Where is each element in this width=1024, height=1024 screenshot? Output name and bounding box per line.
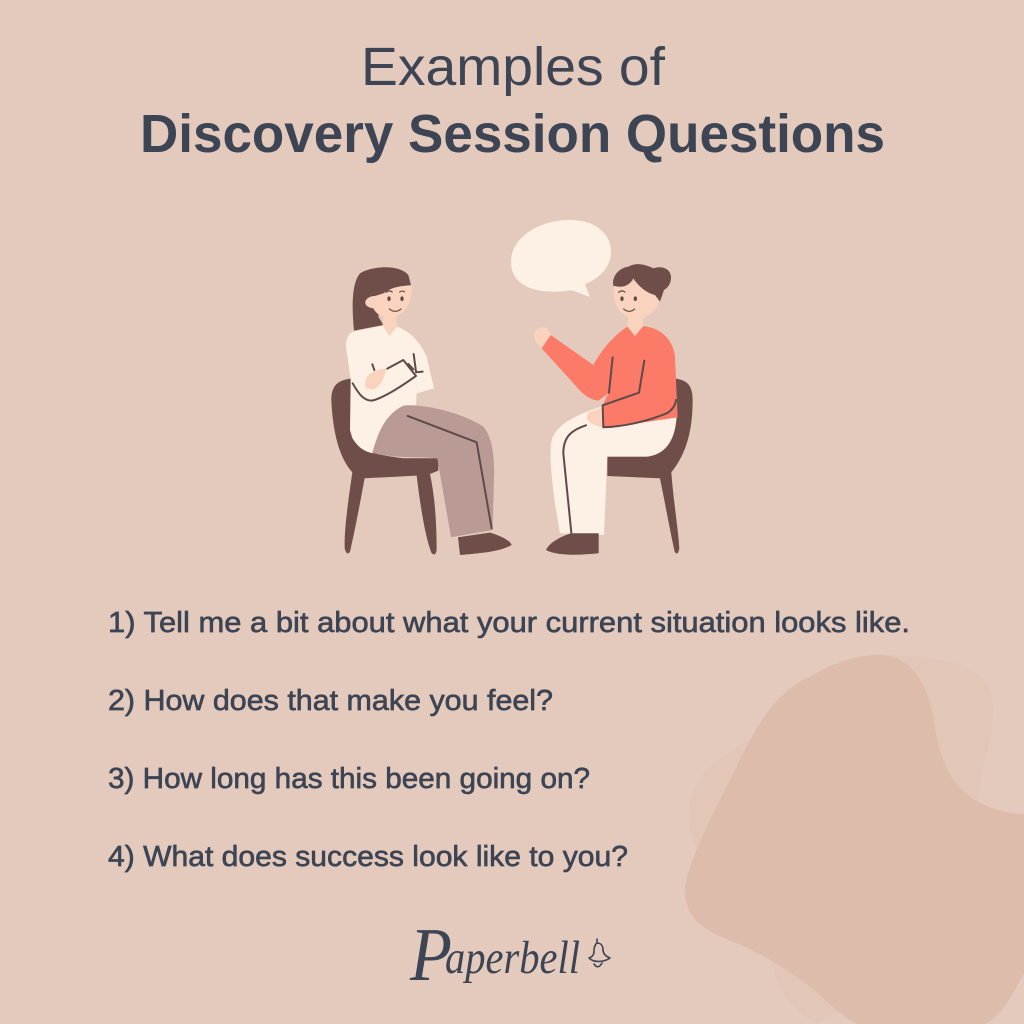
illustration: two people in a discovery session	[331, 220, 693, 555]
question 4: 4) What does success look like to you?	[108, 841, 628, 873]
person: coach with notepad	[331, 267, 512, 555]
logo: Paperbell: aperbell	[445, 932, 580, 984]
trousers	[372, 405, 494, 537]
hand	[365, 369, 386, 389]
title: Discovery Session Questions	[140, 104, 885, 164]
hair	[353, 267, 411, 331]
hair	[613, 264, 671, 302]
neck and face	[365, 286, 412, 336]
trousers	[551, 407, 677, 535]
logo: Paperbell	[409, 913, 610, 997]
neck and face	[614, 282, 659, 336]
face details	[386, 291, 405, 311]
chair	[607, 378, 693, 554]
clothing lines	[563, 357, 676, 533]
question 3: 3) How long has this been going on?	[108, 763, 590, 795]
hand on knee	[587, 407, 603, 427]
top	[542, 326, 678, 428]
question 1: 1) Tell me a bit about what your current situation looks like.	[108, 607, 910, 639]
shoe	[458, 533, 512, 555]
background blob	[685, 655, 1024, 1024]
shirt	[346, 326, 434, 453]
shoe	[546, 533, 599, 555]
chair	[331, 378, 438, 554]
hand raised	[534, 327, 552, 348]
person: client in red top	[534, 264, 693, 555]
icon: bell	[589, 939, 610, 967]
speech bubble	[511, 220, 611, 297]
clothing lines and notepad	[353, 354, 492, 528]
questions list	[108, 607, 910, 873]
title: Examples of	[361, 37, 666, 97]
logo: Paperbell: P	[409, 913, 452, 997]
question 2: 2) How does that make you feel?	[108, 685, 553, 717]
face details	[618, 291, 637, 311]
title	[140, 37, 885, 164]
